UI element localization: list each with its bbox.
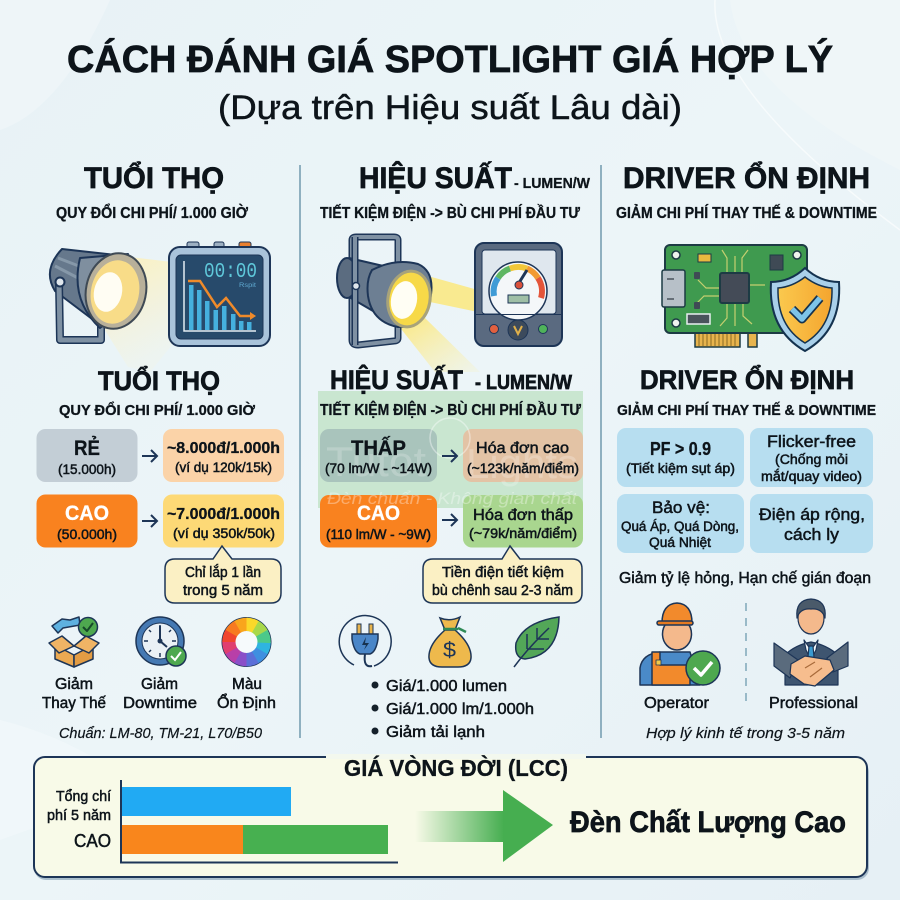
- row: cao: CAO: [65, 502, 109, 525]
- box: bảo vệ: [617, 494, 744, 553]
- box: bảo vệ: Bảo vệ:: [652, 498, 710, 517]
- callout: chỉ lắp 1 lần: Chỉ lắp 1 lần: [185, 564, 261, 581]
- icon labels: [42, 676, 276, 712]
- row: cao: ~7.000đ/1.000h: [167, 506, 280, 523]
- heading: driver repeat: GIẢM CHI PHÍ THAY THẾ & DOWNTIME: [617, 402, 876, 419]
- box: điện áp rộng: Điện áp rộng,: [759, 505, 865, 524]
- row: cao: (110 lm/W - ~9W): [326, 527, 431, 542]
- heading: hiệu suất: [320, 161, 590, 222]
- icon: plug: [339, 616, 391, 666]
- row: cao: (~79k/năm/điểm): [469, 526, 577, 541]
- box: pf: PF > 0.9: [650, 439, 711, 459]
- watermark text: Đèn chuẩn - Không gian chất: [327, 489, 578, 508]
- heading: driver: [616, 161, 877, 222]
- heading: driver repeat: [617, 364, 876, 419]
- heading: tuổi thọ repeat: [59, 365, 255, 419]
- heading: hiệu suất: HIỆU SUẤT: [359, 161, 512, 195]
- standards note: Chuẩn: LM-80, TM-21, L70/B50: [59, 725, 263, 742]
- divider dashed: [745, 603, 747, 705]
- heading: driver: GIẢM CHI PHÍ THAY THẾ & DOWNTIME: [616, 205, 877, 222]
- row: thấp: Hóa đơn cao: [476, 440, 569, 457]
- row: cao: [36, 494, 284, 548]
- persona labels: Operator: [644, 695, 710, 712]
- bar chart: Tổng chí: [56, 788, 112, 805]
- panel: life cycle cost: [34, 754, 869, 880]
- row: thấp: THẤP: [351, 437, 406, 460]
- box: bảo vệ: Quá Nhiệt: [649, 535, 711, 550]
- conclusion text: Đèn Chất Lượng Cao: [570, 806, 846, 839]
- watermark text: [326, 418, 578, 508]
- panel: hiệu suất: [318, 161, 590, 741]
- watermark panel: [318, 391, 583, 508]
- row: cao: Hóa đơn thấp: [473, 507, 573, 524]
- icon: timer chart: Rspit: [239, 283, 256, 289]
- icon: timer chart: [169, 242, 270, 346]
- icon labels: Giảm: [141, 676, 178, 693]
- heading: hiệu suất: - LUMEN/W: [514, 176, 590, 192]
- bullet list: Giá/1.000 lumen: [386, 678, 507, 695]
- bullet list: Giảm tải lạnh: [386, 724, 485, 741]
- heading: tuổi thọ: [56, 161, 249, 222]
- icon: shield: [771, 268, 839, 351]
- box: pf: [617, 428, 744, 487]
- box: flicker-free: mắt/quay video): [761, 469, 862, 484]
- heading: hiệu suất repeat: [320, 364, 581, 419]
- economic note: Hợp lý kinh tế trong 3-5 năm: [646, 725, 845, 742]
- bullet list: [372, 678, 534, 741]
- row: cao: [326, 502, 577, 542]
- box: pf: (Tiết kiệm sụt áp): [626, 461, 735, 476]
- icon: circuit board: [662, 245, 807, 347]
- callout: tiền điện tiết kiệm: bù chênh sau 2-3 năm: [432, 583, 573, 599]
- icon labels: Giảm: [55, 676, 93, 693]
- callout: tiền điện tiết kiệm: [423, 546, 582, 603]
- row: cao: CAO: [357, 502, 400, 525]
- icon: money bag: [429, 617, 471, 667]
- box: flicker-free: Flicker-free: [767, 432, 856, 451]
- icon: power meter: [475, 243, 562, 346]
- icon: colour wheel: [222, 617, 272, 667]
- panel: tuổi thọ: [36, 161, 284, 742]
- persona labels: [644, 695, 858, 712]
- bullet list: Giá/1.000 lm/1.000h: [386, 701, 534, 718]
- icon labels: Thay Thế: [42, 695, 106, 712]
- icon labels: Ổn Định: [217, 694, 276, 712]
- heading: hiệu suất repeat: HIỆU SUẤT: [330, 364, 463, 395]
- text: giảm tỷ lệ hỏng: Giảm tỷ lệ hỏng, Hạn chế gián đoạn: [619, 570, 871, 587]
- callout: chỉ lắp 1 lần: trong 5 năm: [183, 583, 263, 599]
- heading: giá vòng đời: GIÁ VÒNG ĐỜI (LCC): [344, 754, 568, 781]
- title: (Dựa trên Hiệu suất Lâu dài): [218, 89, 682, 127]
- icon: clock: [136, 617, 186, 666]
- persona labels: Professional: [769, 695, 858, 712]
- icon: operator: [640, 603, 720, 685]
- box: flicker-free: [750, 428, 873, 487]
- row: rẻ: [36, 429, 284, 482]
- title: [67, 37, 833, 127]
- row: rẻ: (ví dụ 120k/15k): [175, 460, 272, 475]
- arrow: [415, 790, 553, 862]
- watermark text: Lights: [466, 440, 578, 487]
- icon: spotlight: [50, 248, 172, 372]
- box: điện áp rộng: [750, 494, 873, 553]
- row: thấp: (70 lm/W - ~14W): [325, 461, 432, 476]
- callout: chỉ lắp 1 lần: [165, 546, 281, 603]
- heading: tuổi thọ: QUY ĐỔI CHI PHÍ/ 1.000 GIỜ: [56, 204, 249, 222]
- icon: box: [49, 617, 99, 667]
- heading: hiệu suất repeat: - LUMEN/W: [475, 372, 572, 394]
- bar chart: phí 5 năm: [47, 807, 111, 824]
- icon labels: Downtime: [123, 695, 197, 712]
- heading: tuổi thọ repeat: QUY ĐỔI CHI PHÍ/ 1.000 GIỜ: [59, 401, 255, 419]
- icon: professional: [774, 599, 848, 686]
- box: điện áp rộng: cách ly: [784, 525, 840, 544]
- heading: hiệu suất repeat: TIẾT KIỆM ĐIỆN -> BÙ CHI PHÍ ĐẦU TƯ: [320, 401, 581, 419]
- row: thấp: (~123k/năm/điểm): [467, 461, 579, 476]
- heading: tuổi thọ: TUỔI THỌ: [84, 161, 224, 195]
- icon: money bag: $: [443, 639, 456, 662]
- heading: hiệu suất: TIẾT KIỆM ĐIỆN -> BÙ CHI PHÍ ĐẦU TƯ: [320, 204, 580, 222]
- heading: driver repeat: DRIVER ỔN ĐỊNH: [640, 364, 854, 395]
- panel: driver ổn định: [616, 161, 877, 742]
- row: rẻ: (15.000h): [58, 461, 116, 477]
- row: cao: (ví dụ 350k/50k): [173, 526, 275, 541]
- row: rẻ: RẺ: [74, 437, 100, 460]
- heading: driver: DRIVER ỔN ĐỊNH: [623, 161, 870, 195]
- bar chart: CAO: [74, 831, 111, 851]
- watermark text: Tutot: [326, 438, 426, 485]
- icon labels: Màu: [232, 676, 262, 693]
- icon: timer chart: 00:00: [204, 261, 257, 284]
- row: thấp: [325, 437, 579, 476]
- icon: leaf: [514, 617, 559, 667]
- callout: tiền điện tiết kiệm: Tiền điện tiết kiệm: [442, 565, 564, 581]
- title: CÁCH ĐÁNH GIÁ SPOTLIGHT GIÁ HỢP LÝ: [67, 37, 833, 81]
- heading: tuổi thọ repeat: TUỔI THỌ: [98, 365, 220, 396]
- bar chart: [47, 780, 398, 862]
- row boxes: [320, 429, 583, 548]
- box: bảo vệ: Quá Áp, Quá Dòng,: [621, 519, 739, 534]
- box: flicker-free: (Chống mỏi: [775, 452, 848, 467]
- row: rẻ: ~8.000đ/1.000h: [167, 440, 280, 457]
- row: cao: (50.000h): [57, 526, 117, 542]
- icon: spotlight with beam: [337, 237, 480, 372]
